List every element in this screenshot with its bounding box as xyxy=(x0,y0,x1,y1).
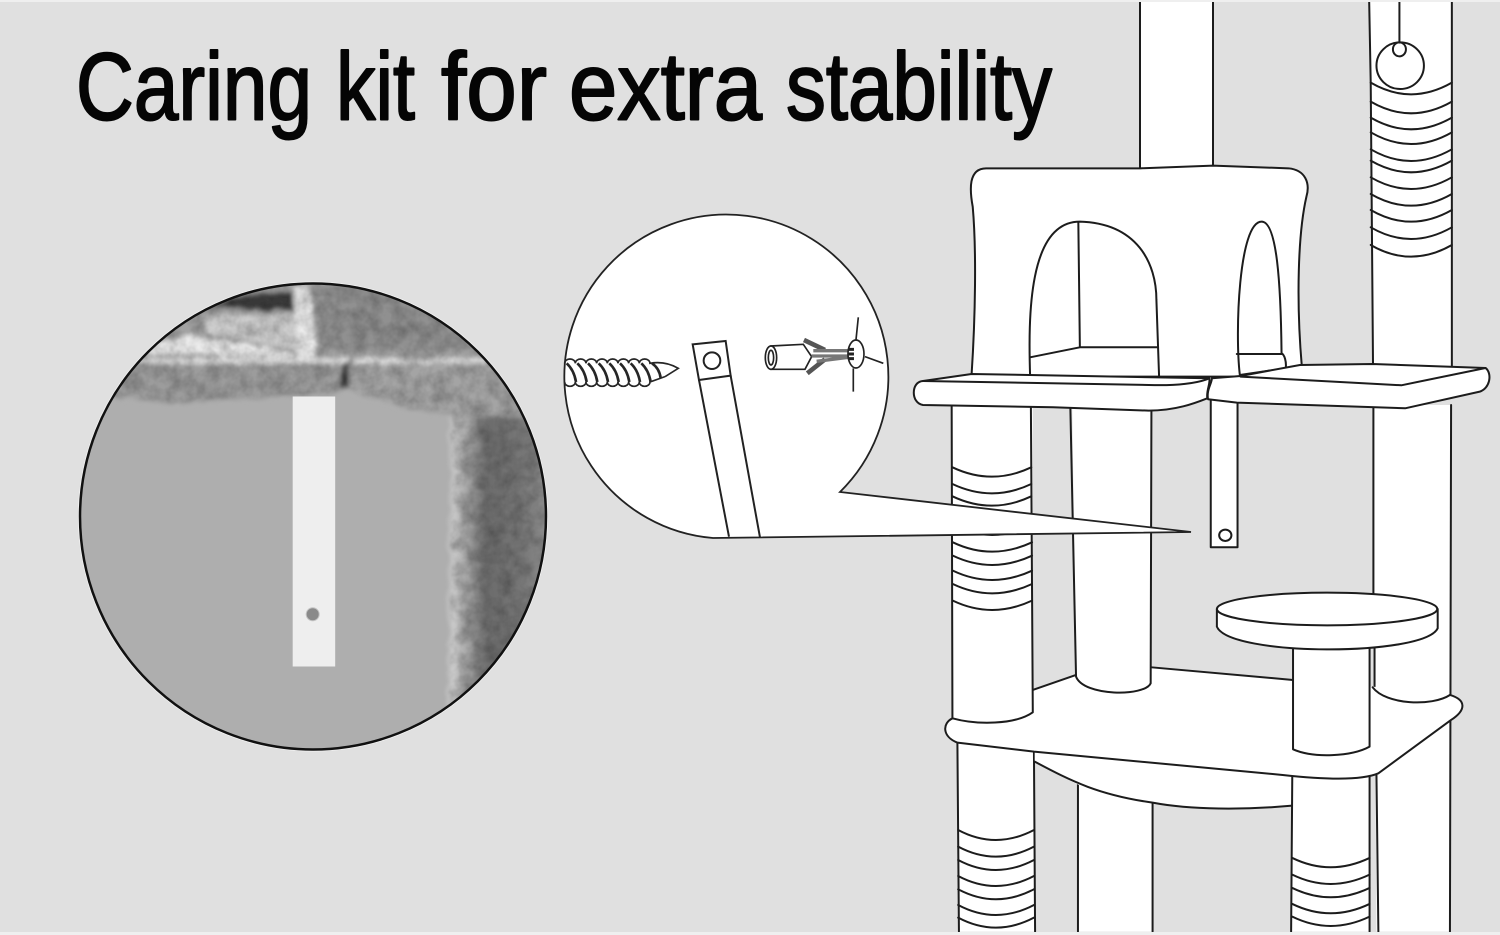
right platform xyxy=(1208,364,1489,408)
round perch xyxy=(1217,593,1438,649)
lower left post xyxy=(957,740,1035,932)
left arch opening xyxy=(1030,222,1159,377)
title xyxy=(76,34,1052,140)
strap screw hole xyxy=(306,608,319,621)
right post with hanging ball xyxy=(1369,2,1452,370)
icon: strap with hole xyxy=(693,341,760,537)
icon: wall anchor xyxy=(765,317,883,392)
rear centre post xyxy=(1070,405,1151,693)
lower posts xyxy=(945,405,1463,932)
panel: cat tree line drawing xyxy=(914,2,1489,932)
left platform xyxy=(914,374,1210,411)
small round perch post xyxy=(1293,647,1370,755)
house xyxy=(971,166,1308,377)
sisal rings on right post xyxy=(1371,83,1452,257)
hanging strap xyxy=(1211,397,1238,547)
front left post xyxy=(952,405,1033,723)
rear post, lower section xyxy=(1078,780,1153,932)
right rear post base curve xyxy=(1373,687,1450,702)
plush fabric platform photo xyxy=(93,270,553,707)
right rear post xyxy=(1373,405,1451,932)
white strap in photo xyxy=(293,396,335,666)
back centre post xyxy=(1140,2,1213,172)
hanging ball toy xyxy=(1376,2,1424,89)
title: extra xyxy=(569,34,763,140)
title: for xyxy=(441,34,547,140)
floor underside bowl xyxy=(1035,752,1294,809)
title: stability xyxy=(786,34,1052,140)
upper house and platforms xyxy=(914,166,1489,547)
title: Caring xyxy=(76,34,312,140)
panel: photo detail circle xyxy=(78,270,553,752)
floor platform xyxy=(945,667,1463,779)
lower right front post xyxy=(1291,775,1370,932)
title: kit xyxy=(336,34,415,140)
callout: magnified hardware bubble with pointer xyxy=(564,215,1191,538)
right arch opening xyxy=(1238,222,1286,375)
icon: screw xyxy=(565,359,678,386)
